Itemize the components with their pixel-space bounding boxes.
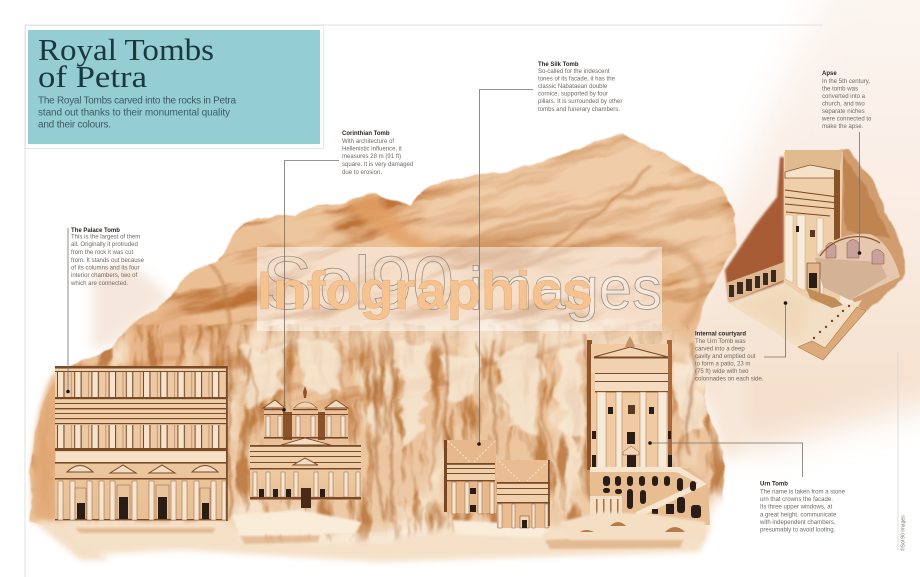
callout: Palace Tomb: of its columns and its four [71,266,140,272]
arcaded terraces [590,467,710,528]
ground [60,520,712,562]
callout: Apse: In the 5th century, [822,79,870,85]
callout: Apse [821,71,872,130]
callout: Apse: church, and two [822,102,865,108]
callout: Palace Tomb: The Palace Tomb [71,228,120,234]
callout: Corinthian Tomb: measures 28 m (91 ft) [342,154,401,160]
ledge with post holes [798,307,866,360]
callout: The Silk Tomb: pillars. It is surrounded by other [538,99,622,105]
title panel [26,26,324,148]
watermark [257,241,662,331]
callout: Urn Tomb: urn that crowns the facade. [760,497,833,503]
callout: The Silk Tomb [538,62,622,113]
apse cutaway [725,150,904,360]
outer rock [830,150,904,312]
background glow band [655,0,920,450]
callout: The Silk Tomb: So-called for the iridescent [538,69,610,75]
callout: The Silk Tomb: tombs and funerary chambers. [538,107,620,113]
Urn Tomb [560,336,710,540]
heading [38,32,214,94]
dark cracks [228,332,694,520]
callout: Internal courtyard: colonnades on each side. [695,376,764,382]
intro text: stand out thanks to their monumental quality [38,108,230,118]
callout: Urn Tomb [759,482,846,534]
courtyard floor [728,283,862,360]
callout: Corinthian Tomb: With architecture of [342,139,394,145]
callout: Urn Tomb: The name is taken from a stone [760,490,846,496]
rubble [560,512,705,540]
right fade into peach [712,340,745,460]
copyright credit: ©Sol 90 Images [900,515,906,551]
callout: The Silk Tomb: cornice, supported by four [538,92,608,98]
callout: Corinthian Tomb: Corinthian Tomb [342,131,390,137]
callout: Urn Tomb: with independent chambers, [759,520,836,526]
facade [784,152,843,305]
faint left haze [92,262,172,350]
watermark: images [469,255,662,322]
apse chamber [815,234,900,300]
callout: Internal courtyard: Internal courtyard [695,332,746,338]
heading: Royal Tombs [38,32,214,67]
doorway [807,263,820,295]
callout: Urn Tomb: Urn Tomb [760,482,788,488]
callout: Internal courtyard: carved into a deep [695,346,745,352]
red-brown rock wedge [725,157,784,302]
callout: Apse: Apse [822,71,837,77]
leader: Internal courtyard [764,301,787,357]
callout: The Silk Tomb: tones of its facade, it has the [538,76,616,82]
rock illustration [28,132,738,545]
callout: Palace Tomb: from the rock it was cut [71,250,133,256]
intro text [38,96,236,130]
heading: of Petra [38,59,147,94]
bottom fade [235,522,454,546]
callout: Urn Tomb: presumably to avoid looting. [760,528,836,534]
callout: Palace Tomb: interior chambers, two of [71,273,138,279]
callout: Apse: separate niches [822,109,865,115]
intro text: and their colours. [38,120,111,130]
callout: Palace Tomb: which are connected. [70,281,128,287]
intro text: The Royal Tombs carved into the rocks in Petra [38,96,236,106]
callout: Palace Tomb: from. It stands out because [71,258,145,264]
leader: Palace Tomb [66,228,70,393]
leader: Apse [858,132,861,255]
leader: Urn Tomb [648,441,802,477]
leader: Corinthian Tomb [282,160,339,412]
callout: The Silk Tomb: classic Nabataean double [538,84,608,90]
callout: Corinthian Tomb [342,131,413,176]
Corinthian Tomb [250,386,361,508]
callout: Palace Tomb: all. Originally it protruded [71,242,138,248]
neighbouring tomb [497,460,550,528]
left rock wash [32,372,58,522]
callout: Internal courtyard: cavity and emptied out [695,354,756,360]
callout: Internal courtyard: (75 ft) wide with two [695,369,749,375]
callout: Palace Tomb: This is the largest of them [71,234,140,240]
callout: Internal courtyard [695,332,764,382]
Silk Tomb [444,440,496,514]
callout: Apse: converted into a [822,94,866,100]
callout: Apse: the tomb was [822,86,858,92]
watermark: Infographics [257,261,593,321]
callout: Apse: were connected to [821,116,872,122]
callout: Corinthian Tomb: Hellenistic influence, it [342,146,402,152]
callout: The Silk Tomb: The Silk Tomb [538,62,579,68]
pale cliff faces [240,345,705,445]
callout: Urn Tomb: Its three upper windows, at [760,504,833,510]
callout: Corinthian Tomb: due to erosion. [342,170,382,176]
callout: Palace Tomb [70,228,145,287]
callout: Apse: make the apse. [822,124,864,130]
callout: Urn Tomb: a great height, communicate [760,512,837,518]
Palace Tomb [55,366,228,521]
leader: Silk Tomb [477,90,533,446]
rock massif [28,132,744,565]
callout: Internal courtyard: to form a patio, 23 m [695,362,750,368]
callout: Internal courtyard: The Urn Tomb was [695,339,746,345]
watermark: Sol90 [262,241,454,325]
callout: Corinthian Tomb: square. It is very damaged [342,162,413,168]
